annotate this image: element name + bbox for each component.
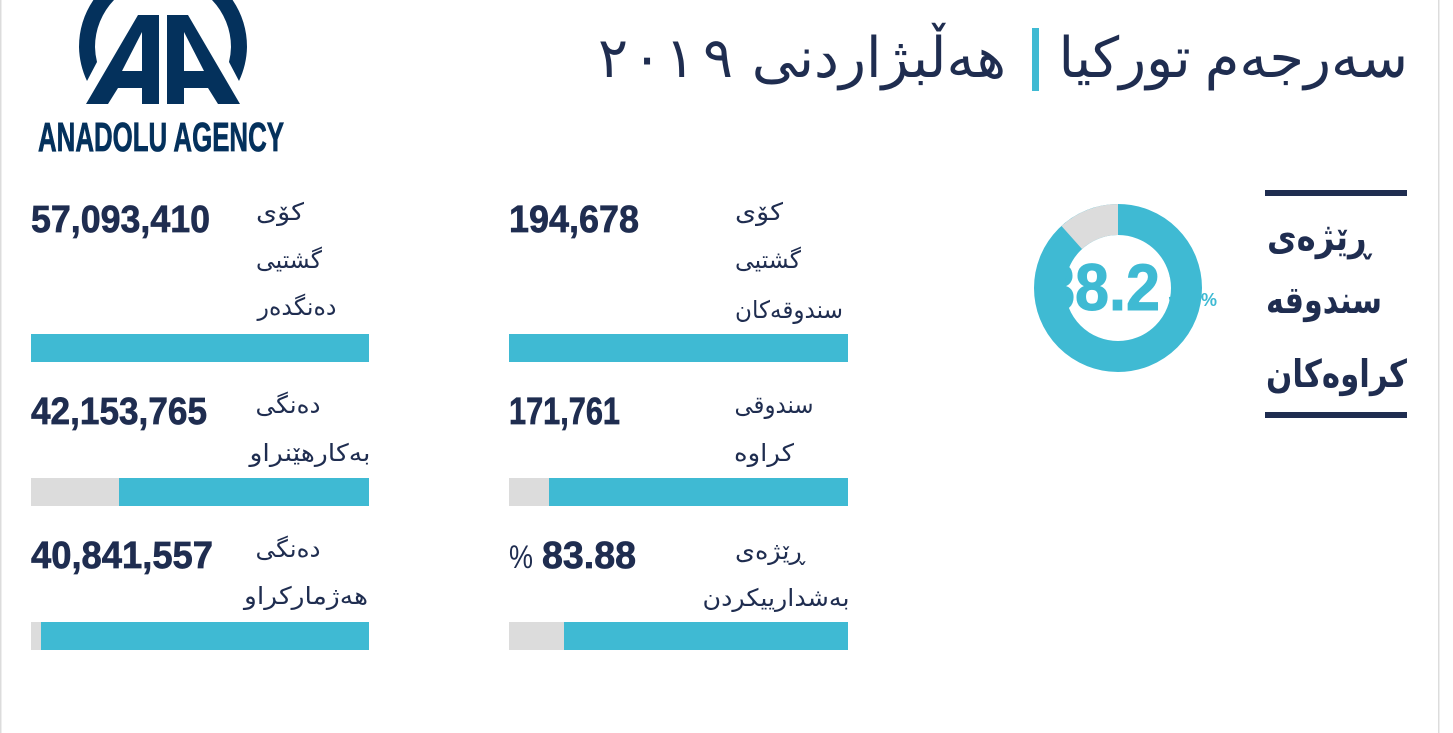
donut chart: open ballot box rate: 88.2 bbox=[1041, 250, 1160, 324]
stat: participation rate: % bbox=[509, 539, 533, 575]
stat: total ballot boxes: کۆی bbox=[735, 200, 784, 226]
stat: votes counted bbox=[31, 535, 369, 650]
stat: total ballot boxes bbox=[509, 199, 848, 362]
heading: open ballot box rate: ڕێژەی bbox=[1267, 217, 1373, 259]
stat: votes counted: دەنگی bbox=[256, 535, 320, 563]
stat: participation rate: ڕێژەی bbox=[735, 539, 806, 565]
donut chart: open ballot box rate: 3 bbox=[1168, 250, 1202, 324]
title: ١ bbox=[665, 28, 695, 90]
stat: total ballot boxes: سندوقەکان bbox=[735, 298, 843, 324]
heading: open ballot box rate: سندوقە bbox=[1266, 280, 1382, 323]
stat: votes used: دەنگی bbox=[256, 391, 320, 419]
title bbox=[598, 22, 1408, 91]
stat: total voters: 57,093,410 bbox=[31, 199, 210, 241]
logo: Anadolu Agency bbox=[38, 0, 284, 160]
title: ٠ bbox=[632, 28, 662, 90]
stat: total voters: دەنگدەر bbox=[257, 293, 336, 321]
stat: total voters: گشتیی bbox=[256, 246, 323, 274]
stat: open ballot boxes: 171,761 bbox=[509, 391, 620, 433]
stat: open ballot boxes: کراوە bbox=[734, 441, 795, 467]
logo: Anadolu Agency: ANADOLU AGENCY bbox=[38, 114, 284, 160]
stat: votes used bbox=[31, 391, 370, 506]
stat: participation rate: بەشدارییکردن bbox=[702, 586, 850, 612]
stat: open ballot boxes: سندوقی bbox=[734, 393, 814, 419]
stat: total voters bbox=[31, 199, 369, 362]
heading: open ballot box rate: کراوەکان bbox=[1266, 354, 1408, 397]
stat: votes used: 42,153,765 bbox=[31, 391, 207, 433]
stat: total ballot boxes: گشتیی bbox=[735, 246, 802, 274]
stat: participation rate: 83.88 bbox=[542, 535, 636, 577]
stat: participation rate bbox=[509, 535, 850, 650]
stat: total voters: کۆی bbox=[256, 200, 305, 226]
stat: votes counted: 40,841,557 bbox=[31, 535, 213, 577]
title: سەرجەم تورکیا bbox=[1059, 28, 1408, 91]
stat: open ballot boxes bbox=[509, 391, 848, 506]
title: ٩ bbox=[703, 28, 733, 90]
stat: votes used: بەکارهێنراو bbox=[248, 441, 370, 467]
stat: total ballot boxes: 194,678 bbox=[509, 199, 639, 241]
stat: votes counted: هەژمارکراو bbox=[243, 584, 368, 610]
donut chart: open ballot box rate bbox=[1041, 204, 1217, 356]
title: هەڵبژاردنی bbox=[752, 22, 1006, 91]
donut chart: open ballot box rate: % bbox=[1201, 290, 1217, 310]
title: ٢ bbox=[598, 28, 628, 90]
heading: open ballot box rate bbox=[1265, 190, 1408, 418]
